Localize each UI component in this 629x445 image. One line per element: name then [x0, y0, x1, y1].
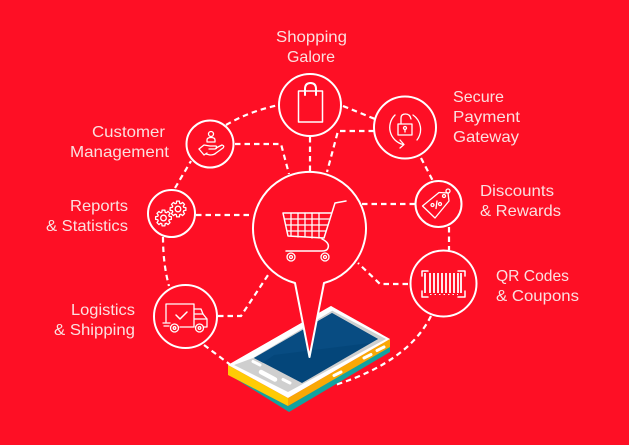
label: customer management: [70, 124, 170, 161]
phone screen: [254, 313, 378, 383]
screen highlight: [254, 313, 378, 363]
phone yellow side: [228, 365, 288, 406]
feature: discounts and rewards: [416, 181, 561, 227]
label: customer management: Customer: [92, 124, 166, 141]
label: shopping galore: Galore: [287, 49, 335, 66]
phone bezel: [234, 310, 386, 392]
feature: secure payment gateway: [374, 89, 521, 158]
icon: gears: [156, 201, 186, 226]
label: qr codes and coupons: [496, 268, 579, 305]
feature: shopping galore: [276, 29, 347, 136]
feature: reports and statistics: [46, 190, 195, 237]
dashed connectors: [163, 105, 449, 385]
label: secure payment gateway: Gateway: [453, 129, 519, 146]
label: secure payment gateway: [453, 89, 521, 146]
label: discounts and rewards: Discounts: [480, 183, 554, 200]
phone orange side: [288, 339, 390, 406]
label: reports and statistics: & Statistics: [46, 218, 128, 235]
icon: price tag: [422, 189, 450, 218]
label: reports and statistics: Reports: [70, 198, 128, 215]
icon: upper gear: [170, 201, 186, 217]
icon: shopping cart: [283, 201, 346, 261]
label: discounts and rewards: & Rewards: [480, 203, 561, 220]
feature: qr codes and coupons: [410, 250, 579, 316]
label: logistics and shipping: & Shipping: [54, 322, 135, 339]
label: qr codes and coupons: & Coupons: [496, 288, 579, 305]
feature: logistics and shipping: [54, 285, 217, 348]
icon: rotating padlock: [390, 114, 421, 148]
label: shopping galore: Shopping: [276, 29, 347, 46]
feature: customer management: [70, 120, 234, 168]
icon: shopping bag: [298, 83, 322, 122]
phone base layer: [231, 346, 390, 412]
label: logistics and shipping: [54, 302, 135, 339]
label: shopping galore: [276, 29, 347, 66]
label: discounts and rewards: [480, 183, 561, 220]
phone upper bezel stripe: [228, 306, 335, 365]
label: secure payment gateway: Secure: [453, 89, 504, 106]
icon: hand holding customer: [199, 132, 224, 155]
icon: barcode: [422, 271, 465, 297]
smartphone: [228, 306, 390, 412]
label: secure payment gateway: Payment: [453, 109, 521, 126]
label: qr codes and coupons: QR Codes: [496, 268, 569, 285]
phone body: [228, 306, 390, 398]
icon: delivery truck: [163, 304, 207, 332]
label: reports and statistics: [46, 198, 128, 235]
central pin with cart: [253, 172, 366, 357]
icon: lower gear: [156, 210, 171, 226]
phone bezel and edge pills: [253, 347, 384, 383]
label: logistics and shipping: Logistics: [71, 302, 135, 319]
label: customer management: Management: [70, 144, 170, 161]
pin outline: [253, 172, 366, 357]
